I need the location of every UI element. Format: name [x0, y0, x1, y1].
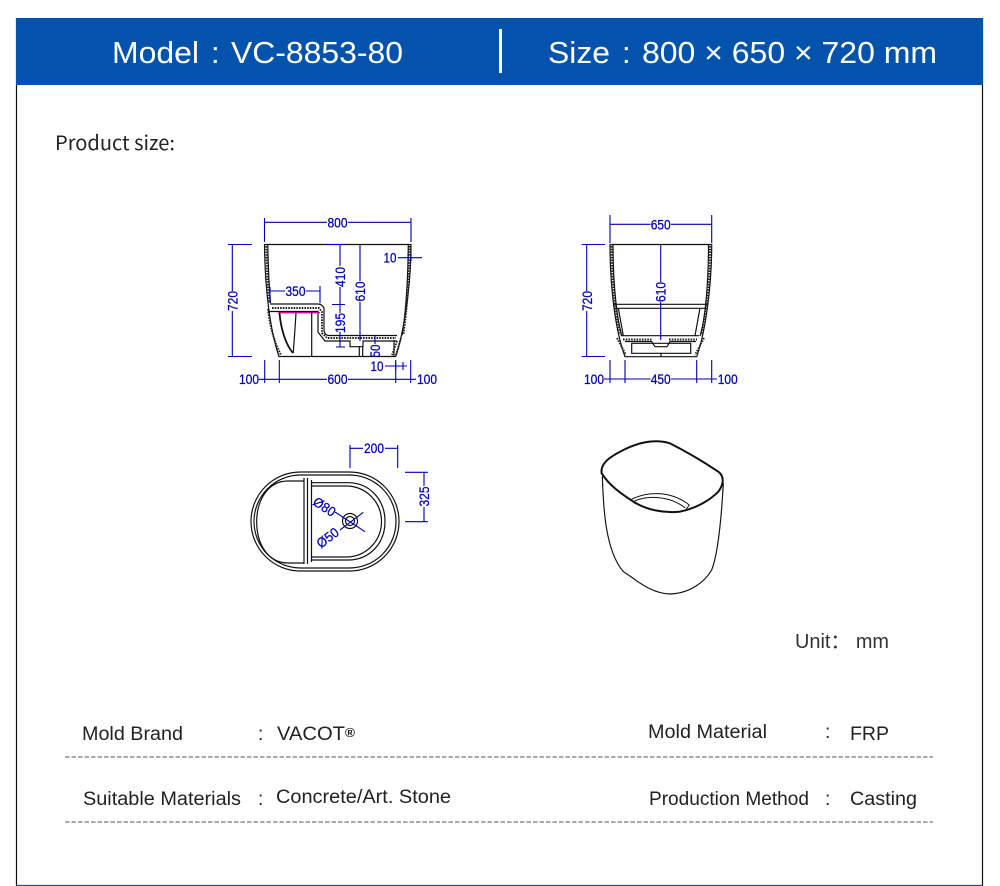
front dimensions: 350 [286, 284, 306, 299]
front dimensions [225, 215, 437, 387]
size title: : [622, 35, 631, 70]
top view dimensions: Ø50 [314, 525, 342, 551]
side dimensions: 100 [718, 372, 738, 387]
model title: VC-8853-80 [231, 35, 403, 70]
front dimensions: 610 [353, 282, 368, 302]
size title: 800 × 650 × 720 mm [642, 35, 937, 70]
side dimensions: 450 [651, 372, 671, 387]
front dimensions: 720 [225, 291, 240, 311]
spec row: mold brand: ® [345, 725, 355, 740]
spec row: mold brand: VACOT [277, 724, 345, 745]
front dimensions: 800 [328, 215, 348, 230]
front dimensions: 410 [333, 267, 348, 287]
top view dimensions: 325 [417, 486, 432, 506]
spec row: production method [649, 789, 917, 810]
spec row: mold material: : [825, 722, 830, 743]
spec row: mold brand: : [258, 724, 263, 745]
spec row: mold material: FRP [850, 724, 889, 745]
top view dimensions [310, 441, 432, 551]
front dimensions: 10 [384, 250, 396, 266]
side dimensions: 100 [584, 372, 604, 387]
size title: Size [548, 35, 610, 70]
spec row: suitable materials: Suitable Materials [83, 789, 241, 810]
top view dimensions: 200 [364, 441, 384, 456]
spec row: suitable materials: : [258, 789, 263, 810]
product size heading: Product size: [55, 127, 175, 156]
side dimensions: 650 [651, 217, 671, 232]
model title [112, 35, 403, 70]
spec row: mold material [648, 722, 889, 745]
drawing: side section view [580, 215, 738, 387]
model title: Model [112, 35, 199, 70]
drawing: top view [251, 441, 432, 571]
spec row: production method: : [825, 789, 830, 810]
front dimensions: 10 [370, 359, 384, 374]
header banner [16, 18, 983, 85]
spec row: mold brand: Mold Brand [82, 724, 183, 745]
spec row: suitable materials [83, 787, 451, 810]
side dimensions [580, 215, 738, 387]
spec row: mold brand [82, 724, 355, 745]
front dimensions: 600 [328, 372, 348, 387]
divider line [65, 756, 933, 758]
spec row: mold material: Mold Material [648, 722, 767, 743]
divider line [65, 821, 933, 823]
model title: : [211, 35, 220, 70]
front dimensions: 100 [417, 372, 437, 387]
drawing: perspective view [601, 441, 723, 594]
side dimensions: 720 [580, 291, 595, 311]
spec row: production method: Casting [850, 789, 917, 810]
front dimensions: 195 [333, 313, 348, 333]
top view dimensions: Ø80 [310, 494, 338, 520]
spec row: suitable materials: Concrete/Art. Stone [276, 787, 451, 808]
drawing: front section view [225, 215, 437, 387]
unit note: Unit： mm [795, 631, 889, 653]
front dimensions: 100 [239, 372, 259, 387]
front dimensions: 50 [368, 344, 383, 358]
spec row: production method: Production Method [649, 789, 809, 810]
side dimensions: 610 [654, 282, 668, 302]
